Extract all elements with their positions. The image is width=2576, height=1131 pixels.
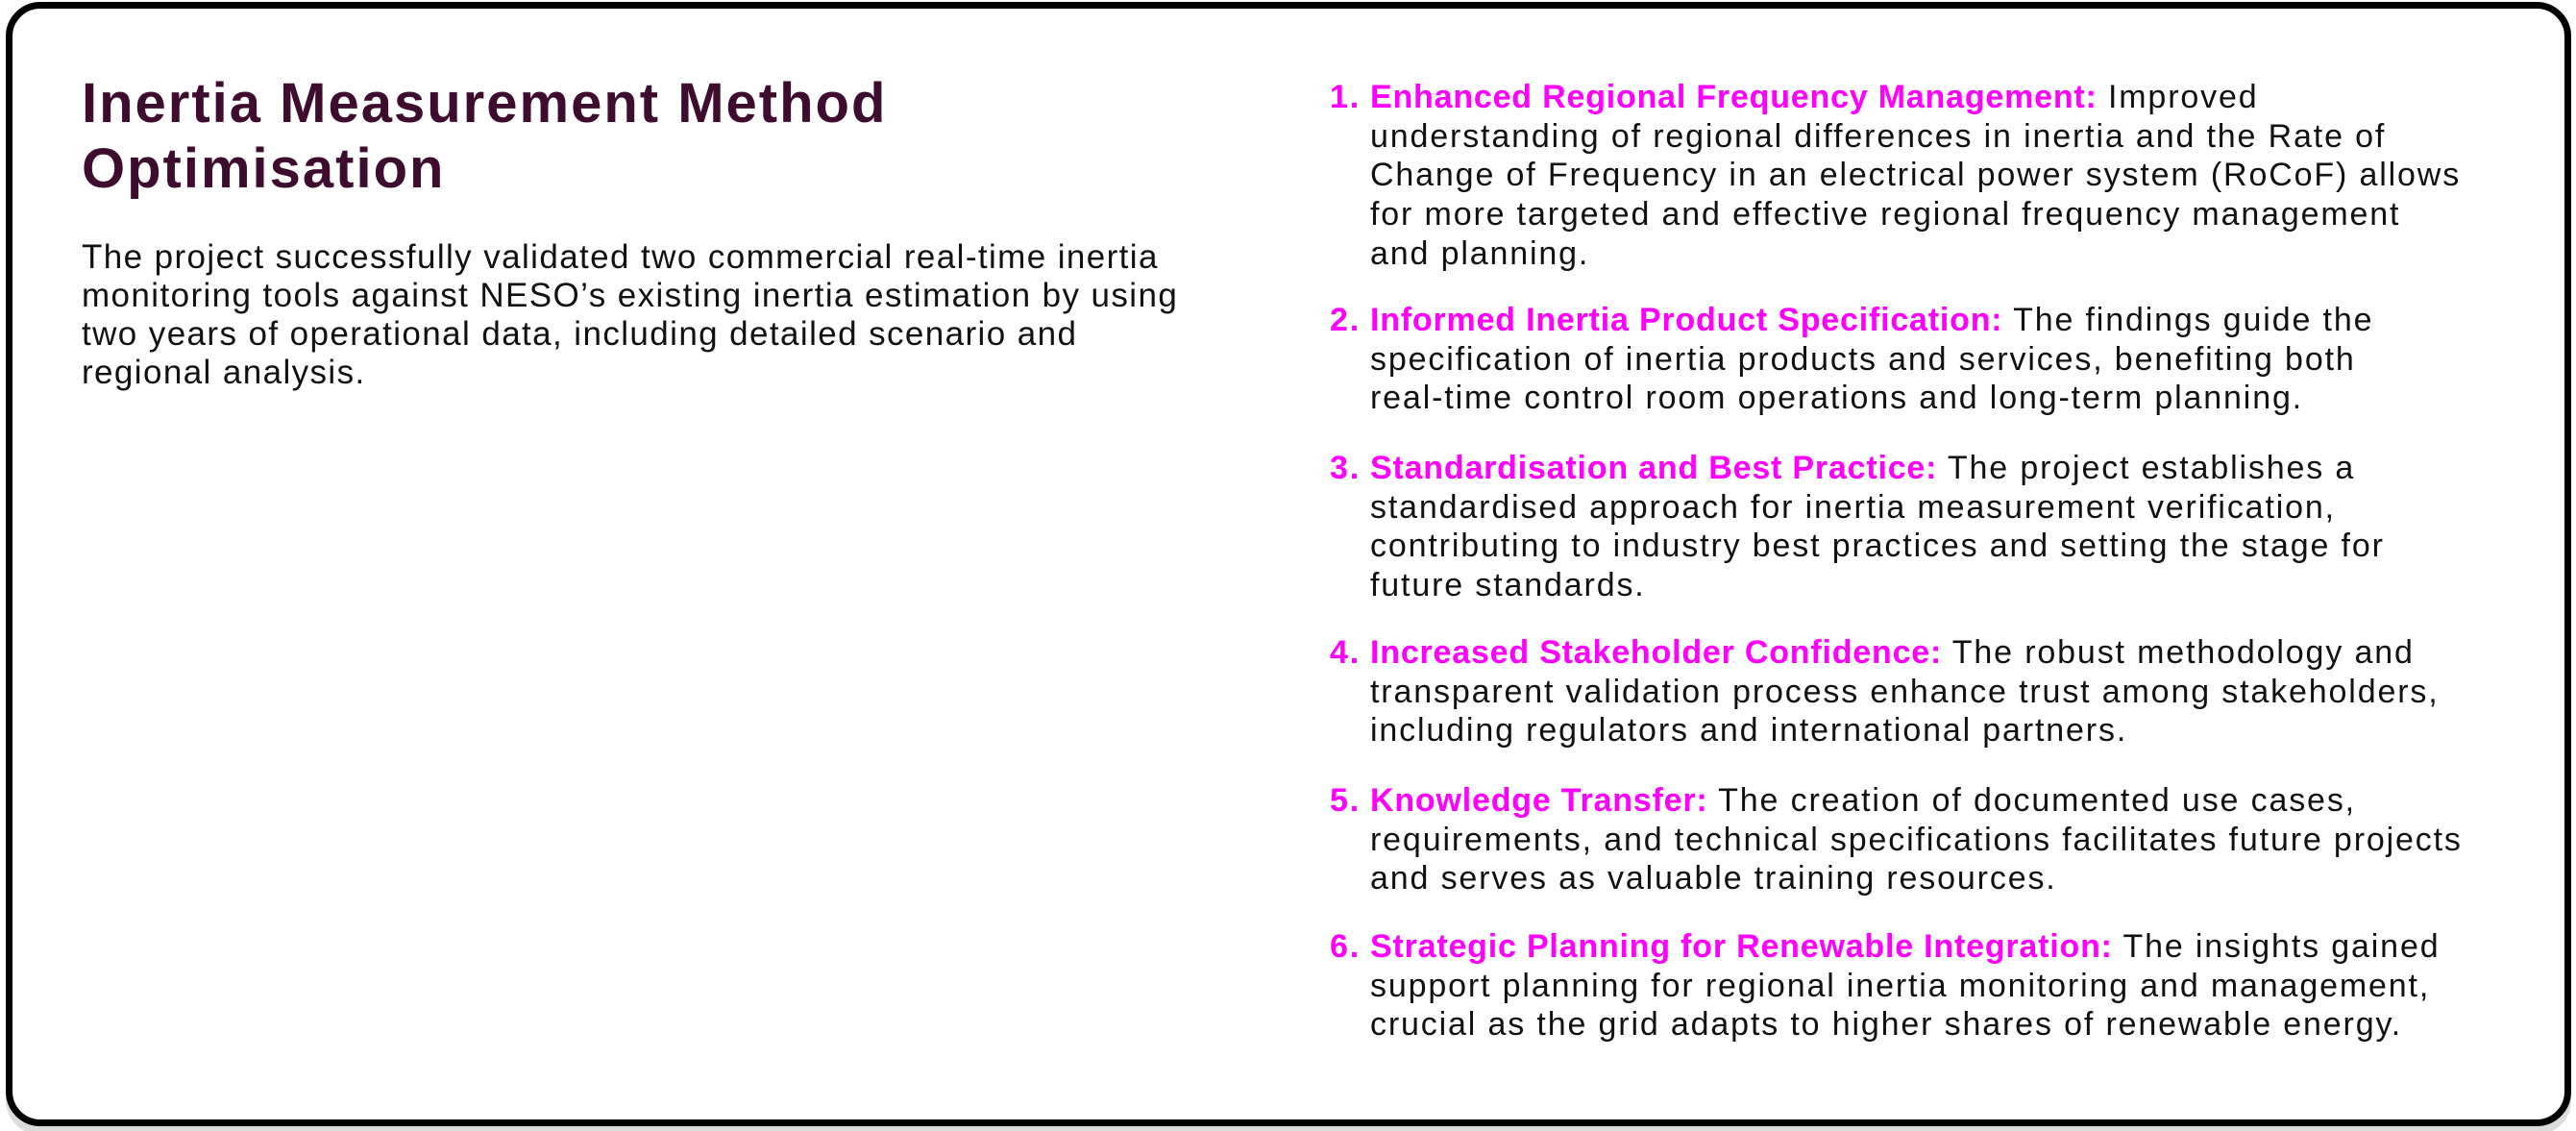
item 1 xyxy=(1330,79,2461,272)
item 5: Knowledge Transfer: The creation of documented use cases, xyxy=(1370,782,2356,819)
item 1: Change of Frequency in an electrical power system (RoCoF) allows xyxy=(1370,157,2461,193)
item 3: Standardisation and Best Practice: The project establishes a xyxy=(1370,450,2355,486)
intro paragraph: monitoring tools against NESO’s existing inertia estimation by using xyxy=(82,277,1178,314)
item 5: requirements, and technical specifications facilitates future projects xyxy=(1370,822,2463,858)
item 6: Strategic Planning for Renewable Integration: The insights gained xyxy=(1370,928,2440,965)
intro paragraph: regional analysis. xyxy=(82,354,366,391)
item 3 xyxy=(1330,450,2385,603)
item 3: 3. xyxy=(1330,450,1361,486)
item 1: for more targeted and effective regional frequency management xyxy=(1370,196,2400,233)
title: Inertia Measurement Method xyxy=(82,72,887,135)
item 2: Informed Inertia Product Specification: The findings guide the xyxy=(1370,302,2373,338)
item 1: Enhanced Regional Frequency Management: Improved xyxy=(1370,79,2258,115)
title xyxy=(82,72,887,200)
item 6: 6. xyxy=(1330,928,1361,965)
item 2: 2. xyxy=(1330,302,1361,338)
intro paragraph: two years of operational data, including detailed scenario and xyxy=(82,315,1077,353)
item 5: 5. xyxy=(1330,782,1361,819)
item 4: 4. xyxy=(1330,634,1361,671)
item 4: Increased Stakeholder Confidence: The robust methodology and xyxy=(1370,634,2415,671)
item 2 xyxy=(1330,302,2373,416)
item 5 xyxy=(1330,782,2463,897)
item 1: and planning. xyxy=(1370,235,1589,272)
intro paragraph xyxy=(82,238,1178,391)
item 2: specification of inertia products and services, benefiting both xyxy=(1370,341,2356,378)
item 2: real-time control room operations and long-term planning. xyxy=(1370,380,2303,416)
item 4: transparent validation process enhance trust among stakeholders, xyxy=(1370,674,2440,710)
intro paragraph: The project successfully validated two commercial real-time inertia xyxy=(82,238,1159,276)
item 6: support planning for regional inertia monitoring and management, xyxy=(1370,968,2430,1004)
item 6: crucial as the grid adapts to higher shares of renewable energy. xyxy=(1370,1006,2402,1043)
title: Optimisation xyxy=(82,137,445,200)
item 4 xyxy=(1330,634,2440,749)
item 1: understanding of regional differences in inertia and the Rate of xyxy=(1370,118,2386,155)
item 3: future standards. xyxy=(1370,567,1646,603)
item 3: standardised approach for inertia measurement verification, xyxy=(1370,489,2336,526)
item 5: and serves as valuable training resources. xyxy=(1370,860,2057,897)
item 4: including regulators and international partners. xyxy=(1370,712,2127,749)
item 1: 1. xyxy=(1330,79,1361,115)
item 3: contributing to industry best practices and setting the stage for xyxy=(1370,528,2385,564)
item 6 xyxy=(1330,928,2440,1043)
